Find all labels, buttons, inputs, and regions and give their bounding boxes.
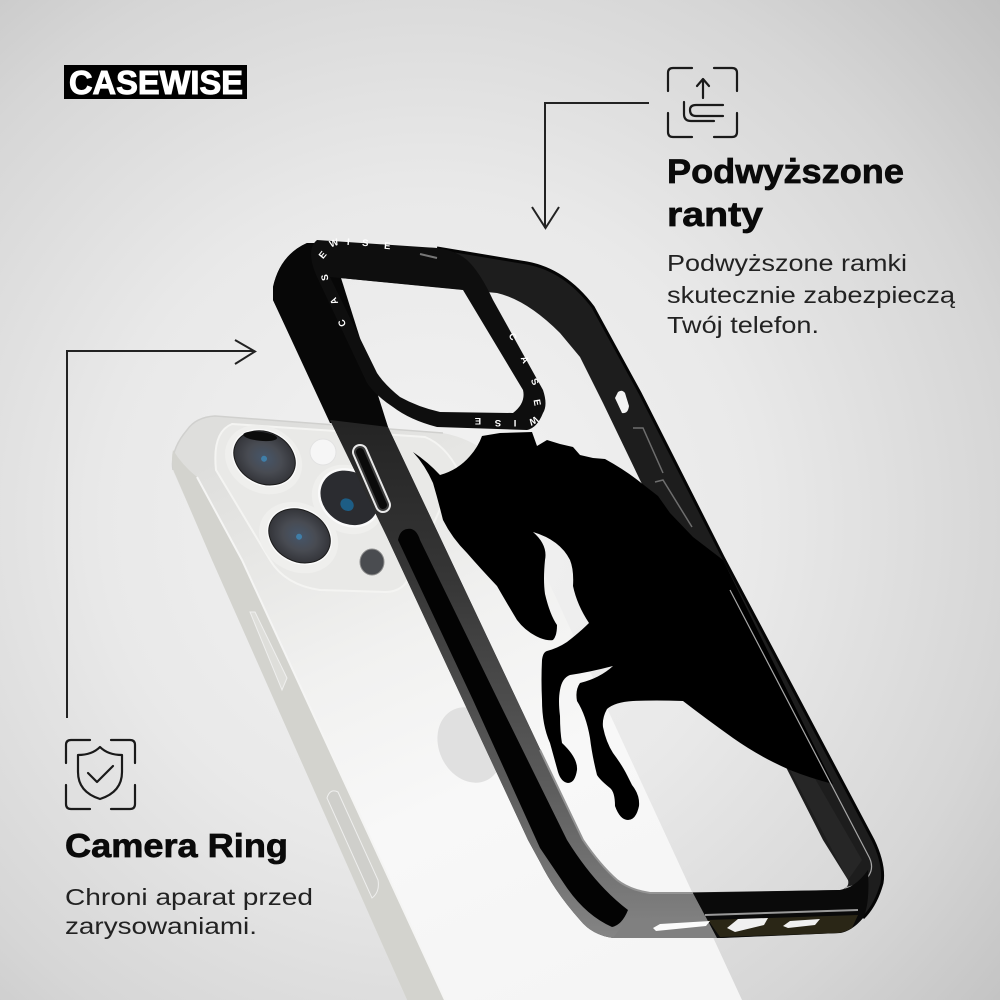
ring logotype: S [495, 417, 501, 428]
lens 2 [246, 488, 351, 587]
text: raised edges description: Twój telefon. [667, 312, 819, 338]
outer edge of right rail [437, 248, 883, 918]
rail details and buttons [633, 428, 872, 888]
text: raised edges description: skutecznie zabezpieczą [667, 282, 956, 308]
icon: shield [66, 740, 135, 809]
silent switch notch [615, 391, 629, 413]
lens 1 [213, 412, 314, 508]
ring logotype: W [527, 413, 540, 427]
ring logotype: C [336, 318, 349, 328]
text: camera ring description: zarysowaniami. [65, 913, 257, 939]
heading: Podwyższone ranty: ranty [667, 196, 763, 234]
ring logotype: S [320, 273, 332, 282]
heading: Camera Ring: Camera Ring [65, 827, 288, 864]
side buttons [250, 612, 287, 690]
rail dark stripe [398, 529, 628, 927]
ring logotype: E [384, 241, 391, 252]
ring logotype: S [362, 238, 369, 249]
solid upper left rail [273, 243, 388, 427]
ring logotype: A [328, 296, 341, 306]
heading: Podwyższone ranty: Podwyższone [667, 153, 904, 191]
apple logo [425, 697, 515, 793]
camera ring [311, 237, 546, 430]
translucent lower left rail over phone [330, 420, 717, 938]
ring logotype: W [328, 237, 340, 250]
text: raised edges description: Podwyższone ramki [667, 250, 907, 276]
ring body [311, 240, 546, 430]
volume button outline [633, 428, 692, 527]
phone body [172, 416, 742, 1000]
camera plateau [215, 424, 458, 592]
highlight line [730, 590, 872, 888]
phone case frame [273, 243, 883, 938]
ring logotype: E [530, 398, 542, 407]
rail inner highlight [540, 750, 693, 893]
icon: raised edges [668, 68, 737, 137]
arrow: top callout to case rim [532, 103, 649, 228]
ring logotype: E [317, 249, 329, 261]
ring logotype [317, 237, 542, 428]
rail light edge [197, 477, 445, 1000]
text: camera ring description [65, 884, 313, 939]
heading: Podwyższone ranty [667, 153, 904, 234]
logo: CASEWISE: CASEWISE [69, 64, 243, 101]
arrow: left callout to camera ring [67, 340, 255, 718]
text: raised edges description [667, 250, 956, 338]
bottom lip over phone [613, 916, 717, 938]
flash [310, 439, 336, 465]
phone top edge [173, 416, 443, 470]
phone [172, 412, 742, 1000]
power button [360, 452, 383, 505]
ring highlight [420, 254, 437, 258]
ring logotype: C [506, 332, 519, 342]
bottom ports [653, 870, 868, 938]
frame body [273, 243, 883, 938]
ring logotype: S [528, 377, 541, 387]
ring logotype: I [346, 237, 350, 248]
ring logotype: E [475, 415, 481, 426]
sensor [360, 549, 384, 575]
ring logotype: I [514, 417, 516, 428]
lens 3 [298, 451, 398, 548]
horse silhouette [413, 432, 833, 820]
text: camera ring description: Chroni aparat przed [65, 884, 313, 910]
ring logotype: A [518, 355, 531, 365]
bottom right strip [790, 770, 862, 880]
phone side rail [172, 450, 445, 1000]
